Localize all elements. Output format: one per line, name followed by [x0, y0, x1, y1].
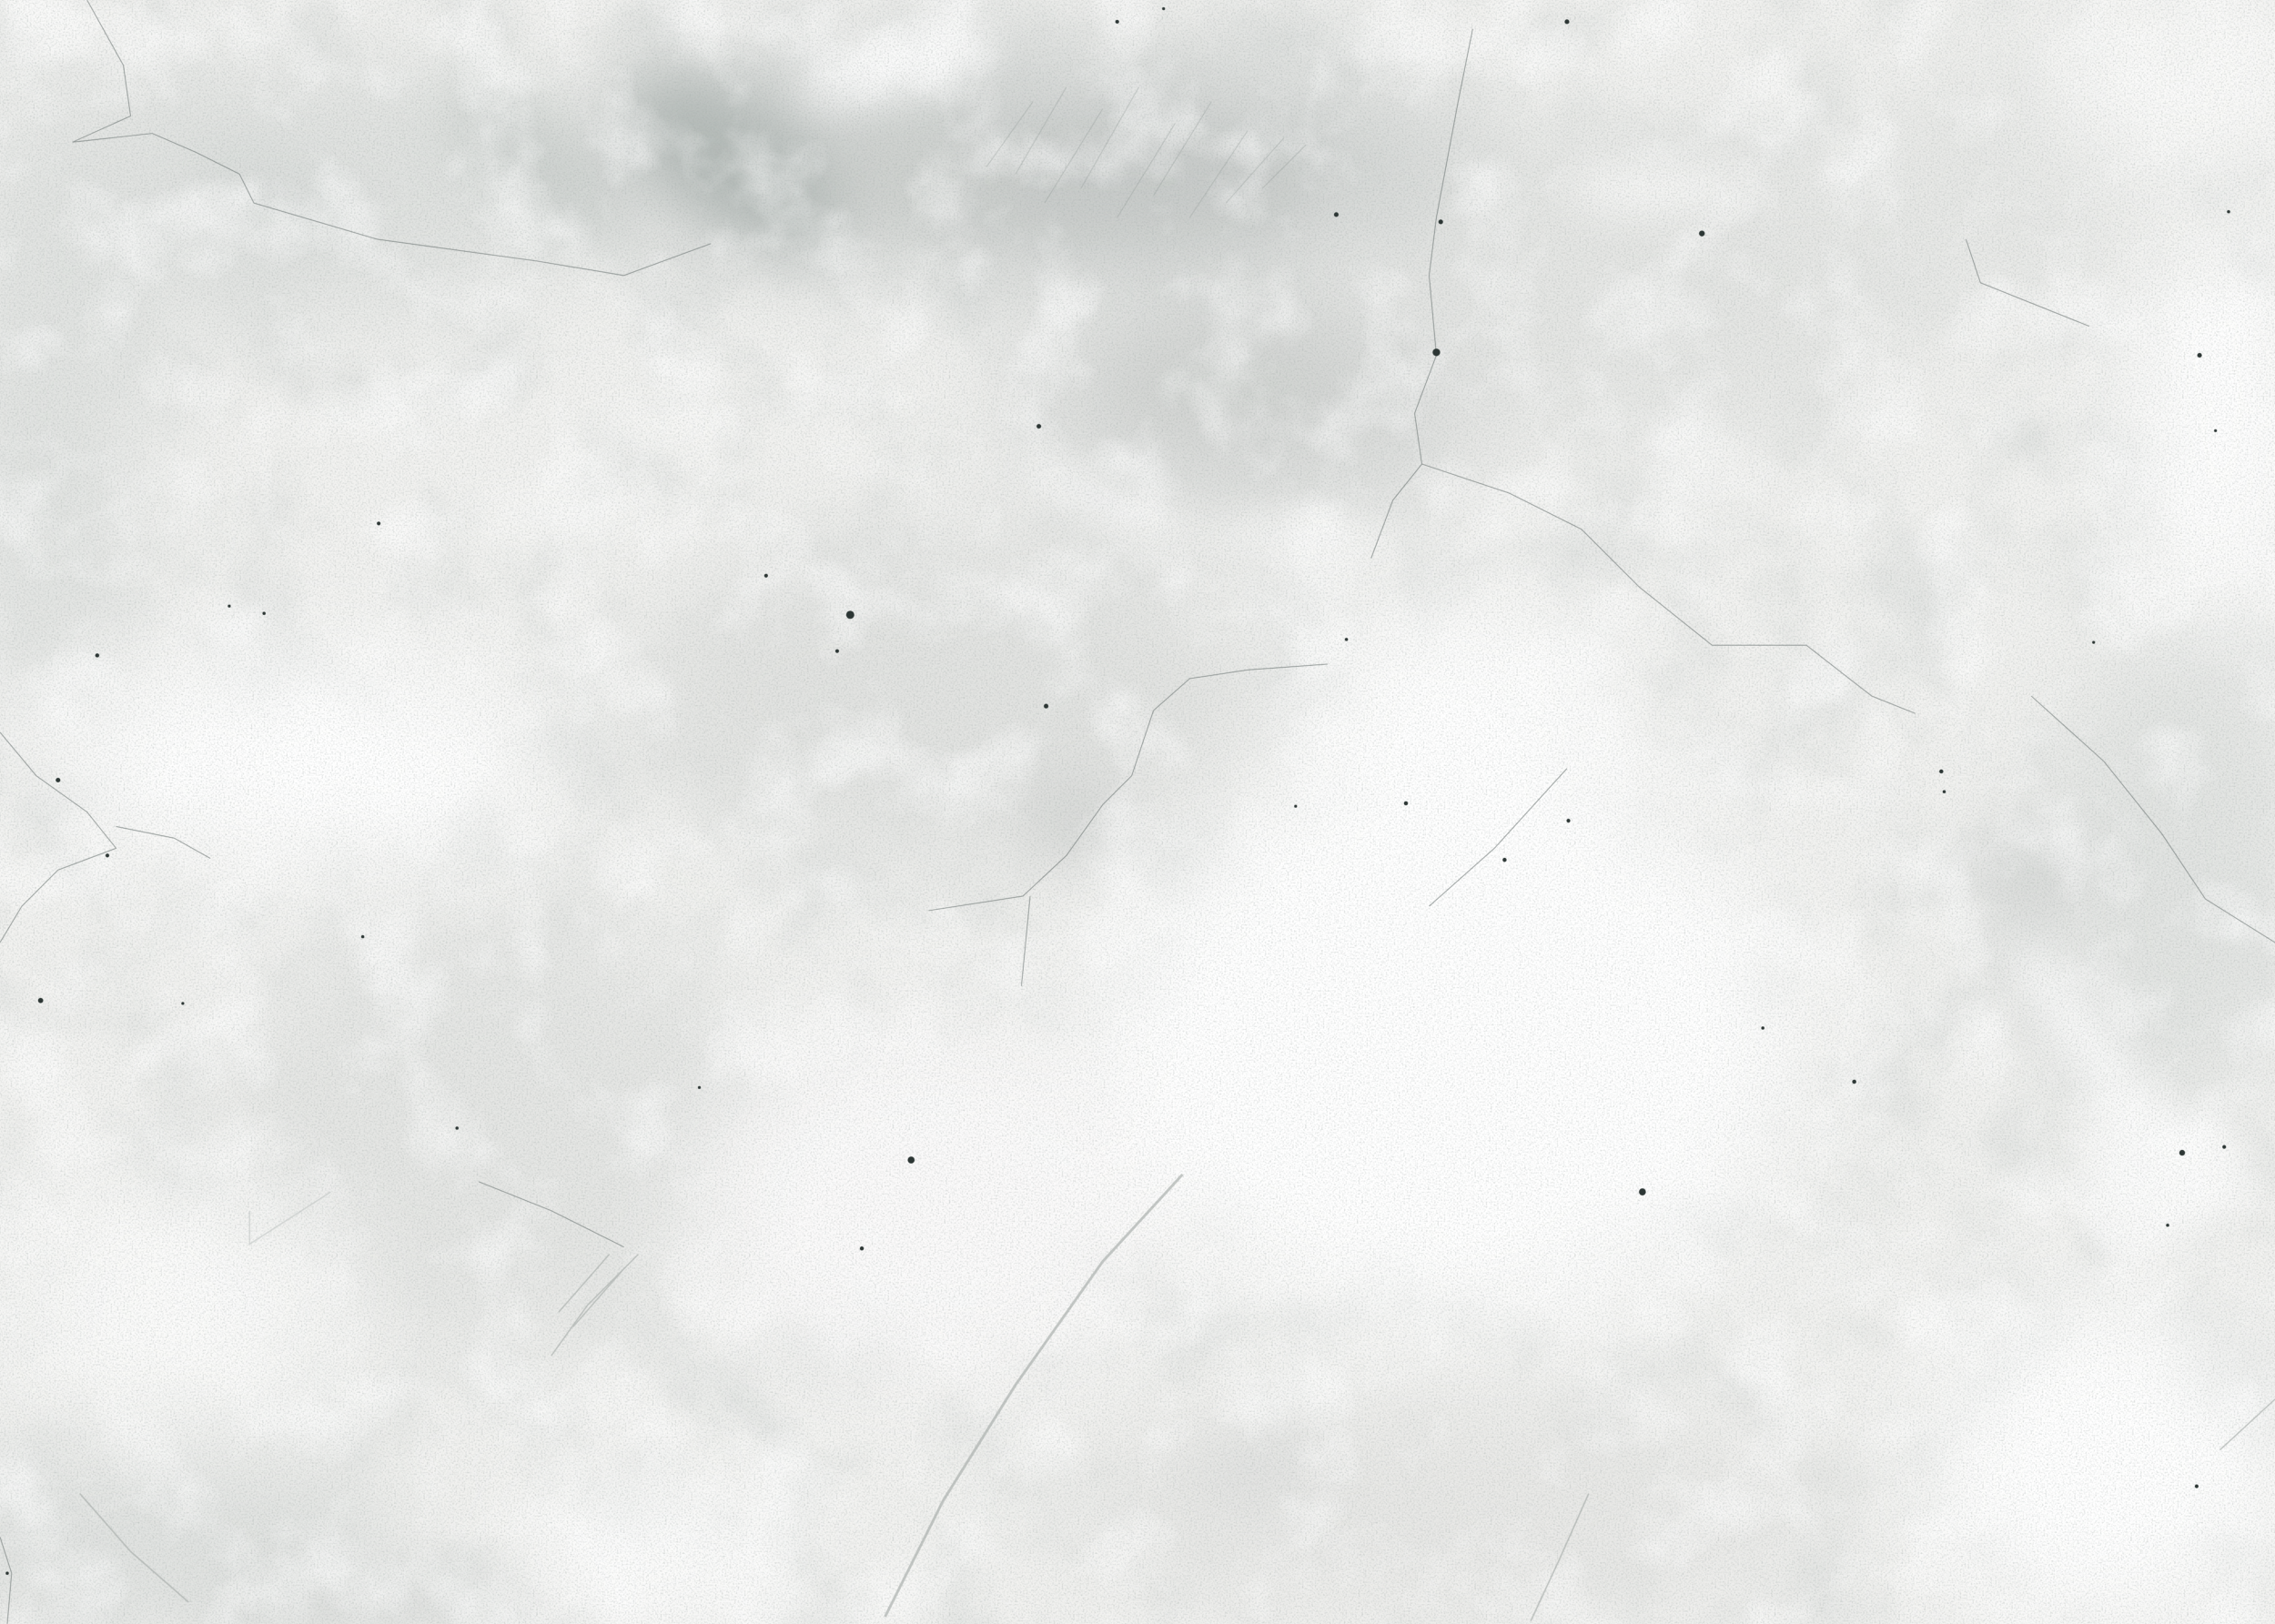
- streak marks at top centre: [986, 87, 1306, 217]
- scratch marks at the bottom: [80, 1175, 2275, 1621]
